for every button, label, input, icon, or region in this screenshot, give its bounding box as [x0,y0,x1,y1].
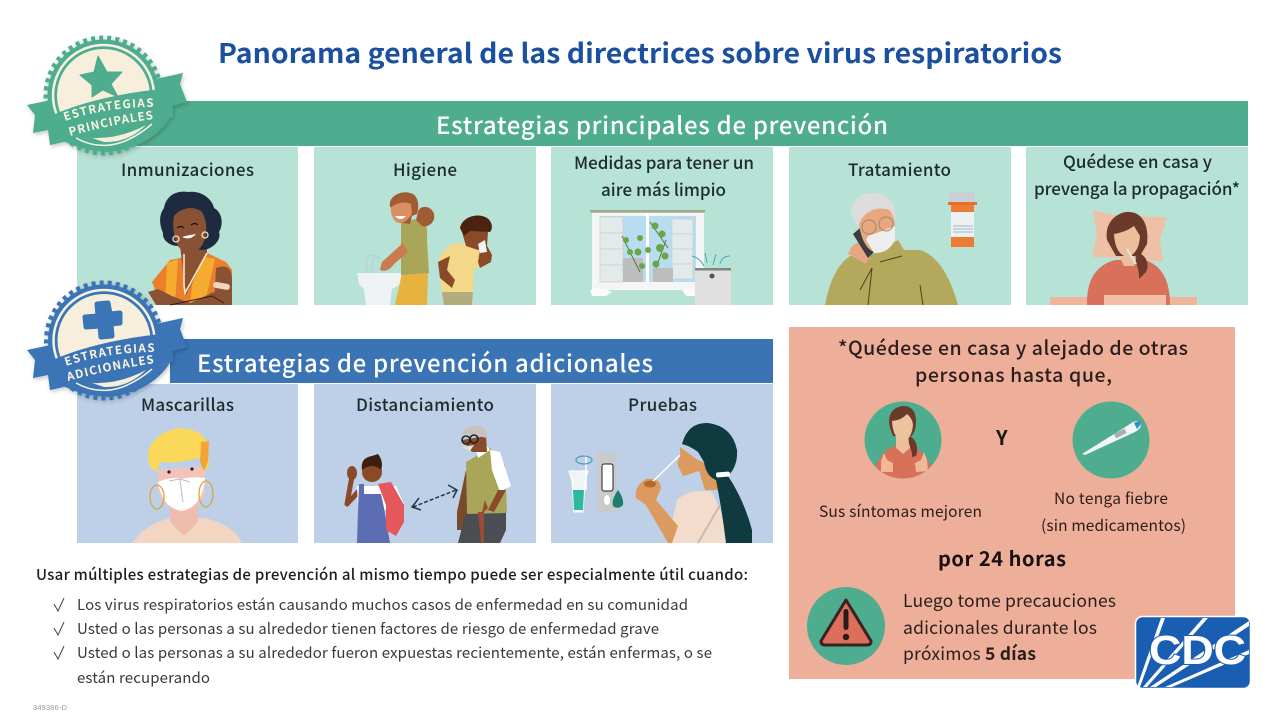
panel: treatment [789,147,1011,305]
heading: Distanciamiento: Distanciamiento [356,391,494,416]
icon: star [80,56,122,97]
logo: CDC [1136,616,1250,688]
text block: when to use multiple strategies [36,564,748,688]
illustration: older man with cane [457,426,511,543]
panel: isolation guidance [789,327,1235,679]
badge: main strategies [27,36,189,159]
icon: plus [85,303,120,337]
panel: testing [551,384,773,543]
illustration: sick woman in bed with thermometer [1050,210,1197,305]
banner: main strategies: Estrategias principales de prevención [436,106,888,141]
list item 3 [54,642,712,688]
badge: additional strategies [27,280,188,404]
heading: Higiene: Higiene [393,156,457,181]
illustration: woman in mask [133,428,242,543]
text: no fever [1041,487,1186,536]
heading: Pruebas: Pruebas [628,391,697,416]
connector: Y: Y [995,422,1008,451]
panel: immunizations [77,147,298,305]
list item 3: están recuperando [77,667,210,688]
panel: hygiene [314,147,536,305]
illustration: woman using nasal swab [636,423,752,543]
illustration: open window with air purifier [590,210,731,305]
badge label: ESTRATEGIAS ADICIONALES: ESTRATEGIAS [64,343,154,366]
heading: stay home until: *Quédese en casa y alejado de otras [838,332,1188,361]
illustration: pill bottle [948,192,977,247]
arrow: two-way distancing arrow [412,485,457,510]
heading: Medidas para tener un aire más limpio: Medidas para tener un [574,149,754,174]
panel: distancing [314,384,536,543]
logo: CDC: CDC [1149,627,1246,673]
heading: stay home until: personas hasta que, [915,359,1112,388]
list item 2: Usted o las personas a su alrededor tienen factores de riesgo de enfermedad grave [77,618,659,639]
list item 3: Usted o las personas a su alrededor fueron expuestas recientemente, están enfermas, o se [77,642,712,663]
heading: Quédese en casa y prevenga la propagación: Quédese en casa y [1063,148,1213,173]
text: no fever: No tenga fiebre [1054,487,1168,509]
text: take precautions [903,588,1116,666]
banner: additional strategies [170,339,773,383]
text: take precautions: próximos 5 días [903,641,1036,666]
icon: thermometer [1072,402,1150,478]
illustration: handwashing woman and boy with tissue [357,192,492,305]
heading: Quédese en casa y prevenga la propagación: prevenga la propagación* [1034,175,1240,200]
illustration: child with backpack [347,454,404,543]
panel: cleaner air [551,147,773,305]
title: Panorama general de las directrices sobre virus respiratorios [218,32,1062,71]
text block: when to use multiple strategies: Usar múltiples estrategias de prevención al mismo tiempo puede ser especialmente útil cuando: [36,564,748,585]
text: no fever: (sin medicamentos) [1041,514,1186,536]
icon: woman thumbs up [864,402,942,480]
badge label: ESTRATEGIAS PRINCIPALES [63,98,154,136]
badge label: ESTRATEGIAS PRINCIPALES: ESTRATEGIAS [63,98,154,121]
heading: Medidas para tener un aire más limpio: aire más limpio [601,176,726,201]
banner: main strategies [77,101,1248,146]
heading: Inmunizaciones: Inmunizaciones [121,156,254,181]
icon: warning [807,587,885,665]
heading: Mascarillas: Mascarillas [141,391,234,416]
text: take precautions: Luego tome precauciones [903,588,1116,613]
panel: stay home [1026,147,1248,305]
illustration: older man on phone [825,193,958,305]
heading: stay home until [838,332,1188,388]
panel: masks [77,384,298,543]
text: for 24 hours: por 24 horas [938,543,1066,572]
document code: 349386-D [33,703,68,712]
text: symptoms improve: Sus síntomas mejoren [819,500,982,522]
badge label: ESTRATEGIAS PRINCIPALES: PRINCIPALES [68,110,152,136]
list item 1: Los virus respiratorios están causando muchos casos de enfermedad en su comunidad [77,594,688,615]
text: take precautions: adicionales durante los [903,615,1097,640]
banner: additional strategies: Estrategias de prevención adicionales [197,344,653,379]
illustration: smiling woman with bandage [148,192,232,305]
badge label: ESTRATEGIAS ADICIONALES: ADICIONALES [68,355,154,381]
heading: Medidas para tener un aire más limpio [574,149,754,201]
heading: Tratamiento: Tratamiento [848,156,951,181]
illustration: test kit [569,452,623,512]
heading: Quédese en casa y prevenga la propagación [1034,148,1240,200]
